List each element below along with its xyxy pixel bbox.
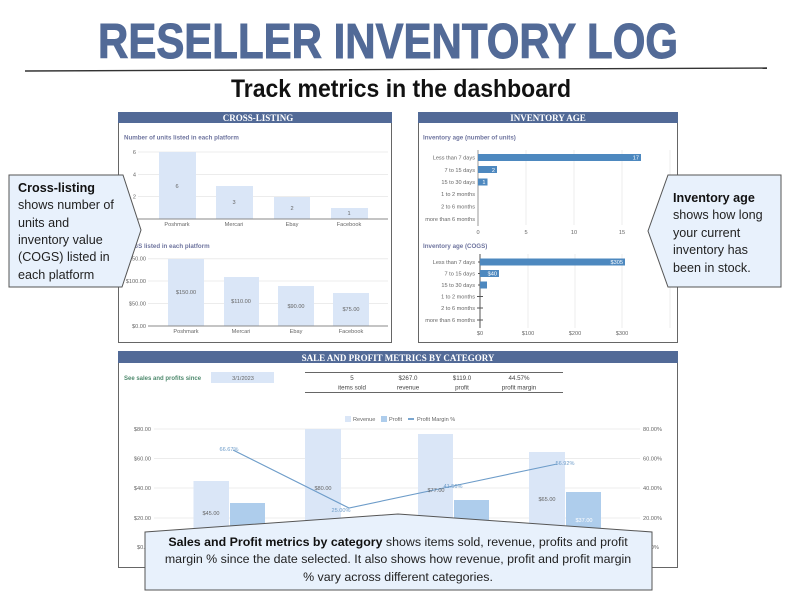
combo chart: $80.00 <box>314 486 332 492</box>
date filter <box>124 372 274 383</box>
chart: units per platform: 2 <box>290 206 294 212</box>
combo chart: $45.00 <box>202 511 220 517</box>
chart: age by COGS: 7 to 15 days <box>445 272 475 278</box>
chart legend <box>345 416 455 423</box>
chart: units per platform: 6 <box>175 184 179 190</box>
chart: age by units: 2 to 6 months <box>441 204 475 210</box>
chart: age by units: more than 6 months <box>425 217 475 223</box>
chart: units per platform: 6 <box>133 150 136 156</box>
chart: age by units: 5 <box>524 230 528 236</box>
chart: age by COGS: Inventory age (COGS) <box>423 243 487 250</box>
combo chart: 66.67% <box>220 447 239 453</box>
chart: units per platform: Mercari <box>225 222 243 228</box>
chart: COGS per platform: Poshmark <box>173 329 199 335</box>
chart: age by units <box>423 134 670 236</box>
inventory age header <box>418 112 678 123</box>
combo chart <box>134 427 662 551</box>
chart: age by COGS: $100 <box>522 331 534 337</box>
chart: age by COGS: $0 <box>477 331 483 337</box>
subtitle: Track metrics in the dashboard <box>231 75 571 103</box>
callout: cross-listing: Cross-listing <box>18 181 95 195</box>
chart: units per platform: Facebook <box>337 222 361 228</box>
combo chart: 60.00% <box>643 456 662 462</box>
chart: age by units: 2 <box>492 168 495 174</box>
summary metrics: $267.0 <box>399 375 418 382</box>
callout: cross-listing: inventory value <box>18 233 103 247</box>
chart: COGS per platform <box>124 243 388 335</box>
chart: COGS per platform: Ebay <box>290 329 303 335</box>
panel: cross-listing <box>118 112 392 342</box>
combo chart: 80.00% <box>643 427 662 433</box>
summary metrics: 44.57% <box>508 375 530 382</box>
summary metrics <box>305 372 563 392</box>
callout: sales and profit metrics: margin % since the date selected. It also shows how revenue, profit and profit margin <box>165 552 631 566</box>
callout: inventory age: Inventory age <box>673 191 755 205</box>
callout: inventory age: shows how long <box>673 208 763 222</box>
chart: units per platform: 3 <box>232 200 236 206</box>
chart: COGS per platform: $90.00 <box>287 304 305 310</box>
cross-listing header: CROSS-LISTING <box>223 113 293 123</box>
combo chart: $60.00 <box>134 456 151 462</box>
combo chart: 41.56% <box>444 484 463 490</box>
chart: age by COGS <box>423 243 670 337</box>
chart: age by units: Inventory age (number of units) <box>423 134 516 142</box>
chart: COGS per platform: $0.00 <box>132 324 146 330</box>
combo chart: $65.00 <box>538 497 556 503</box>
chart: units per platform: Number of units listed in each platform <box>124 134 239 142</box>
callout: sales and profit metrics: Sales and Profit metrics by category shows items sold, revenue, profits and profit <box>168 535 628 549</box>
summary metrics: profit margin <box>502 384 537 392</box>
summary metrics: profit <box>455 384 469 392</box>
chart: COGS per platform: COGS listed in each platform <box>124 243 210 250</box>
chart: units per platform: 4 <box>133 172 136 178</box>
summary metrics: items sold <box>338 384 366 392</box>
callout: sales and profit metrics: % vary across different categories. <box>303 570 493 584</box>
chart: COGS per platform: Facebook <box>339 329 363 335</box>
chart: age by COGS: 15 to 30 days <box>441 283 475 289</box>
chart: age by COGS: $300 <box>616 331 628 337</box>
chart: age by COGS: 1 to 2 months <box>441 294 475 300</box>
chart legend: Profit Margin % <box>417 417 455 423</box>
chart: age by units: 7 to 15 days <box>445 168 475 174</box>
chart: age by COGS: $40 <box>488 272 497 278</box>
sale and profit header: SALE AND PROFIT METRICS BY CATEGORY <box>302 353 495 363</box>
combo chart: $80.00 <box>134 427 151 433</box>
callout: cross-listing: shows number of <box>18 198 114 212</box>
combo chart: 40.00% <box>643 486 662 492</box>
combo chart: 56.92% <box>556 461 575 467</box>
chart: age by COGS: Less than 7 days <box>433 260 475 266</box>
chart: age by COGS: $305 <box>611 260 623 266</box>
summary metrics: revenue <box>397 384 420 392</box>
combo chart: 0.00% <box>643 545 659 551</box>
chart: COGS per platform: $110.00 <box>231 299 251 305</box>
chart: age by units: 17 <box>633 156 639 162</box>
combo chart: 20.00% <box>643 516 662 522</box>
chart: COGS per platform: $50.00 <box>129 302 146 308</box>
chart: age by COGS: $200 <box>569 331 581 337</box>
chart: COGS per platform: $100.00 <box>126 279 146 285</box>
chart legend: Profit <box>389 417 403 423</box>
chart: age by COGS: 2 to 6 months <box>441 306 475 312</box>
chart: age by units: 1 to 2 months <box>441 192 475 198</box>
callout: inventory age: your current <box>673 226 741 240</box>
panel: inventory age <box>418 112 678 342</box>
combo chart: $40.00 <box>134 486 151 492</box>
callout: inventory age: been in stock. <box>673 261 751 275</box>
chart: age by units: 0 <box>476 230 480 236</box>
chart: units per platform <box>124 134 388 228</box>
chart: units per platform: 2 <box>133 194 136 200</box>
combo chart: $0.00 <box>137 545 151 551</box>
combo chart: $77.00 <box>427 488 445 494</box>
chart: age by units: 15 to 30 days <box>441 180 475 186</box>
chart: units per platform: Poshmark <box>164 222 190 228</box>
chart: COGS per platform: $150.00 <box>126 256 146 262</box>
title: RESELLER INVENTORY LOG <box>98 15 678 69</box>
summary metrics: $119.0 <box>453 375 472 382</box>
summary metrics: 5 <box>350 375 354 382</box>
chart: units per platform: Ebay <box>286 222 299 228</box>
combo chart: 25.00% <box>332 508 351 514</box>
chart: age by units: 1 <box>482 180 486 186</box>
cross-listing header <box>118 112 392 123</box>
callout: cross-listing: units and <box>18 216 69 230</box>
callout: sales and profit metrics <box>145 514 652 590</box>
chart: age by units: 15 <box>619 230 625 236</box>
sale and profit header <box>118 351 678 363</box>
chart: age by COGS: more than 6 months <box>425 318 475 324</box>
chart: COGS per platform: Mercari <box>232 329 250 335</box>
chart: COGS per platform: $150.00 <box>176 290 196 296</box>
combo chart: $37.00 <box>575 518 593 524</box>
chart legend: Revenue <box>353 417 375 423</box>
date filter: 3/1/2023 <box>232 376 254 382</box>
callout: cross-listing <box>9 175 141 287</box>
callout: inventory age: inventory has <box>673 243 748 257</box>
combo chart: $20.00 <box>134 516 151 522</box>
callout: inventory age <box>648 175 781 287</box>
chart: age by units: 10 <box>571 230 577 236</box>
chart: age by units: Less than 7 days <box>433 156 475 162</box>
callout: cross-listing: (COGS) listed in <box>18 250 110 264</box>
chart: units per platform: 1 <box>347 211 351 217</box>
callout: cross-listing: each platform <box>18 268 94 282</box>
date filter: See sales and profits since <box>124 376 202 382</box>
inventory age header: INVENTORY AGE <box>510 113 586 123</box>
chart: COGS per platform: $75.00 <box>342 307 360 313</box>
panel: sale and profit metrics <box>118 351 678 568</box>
